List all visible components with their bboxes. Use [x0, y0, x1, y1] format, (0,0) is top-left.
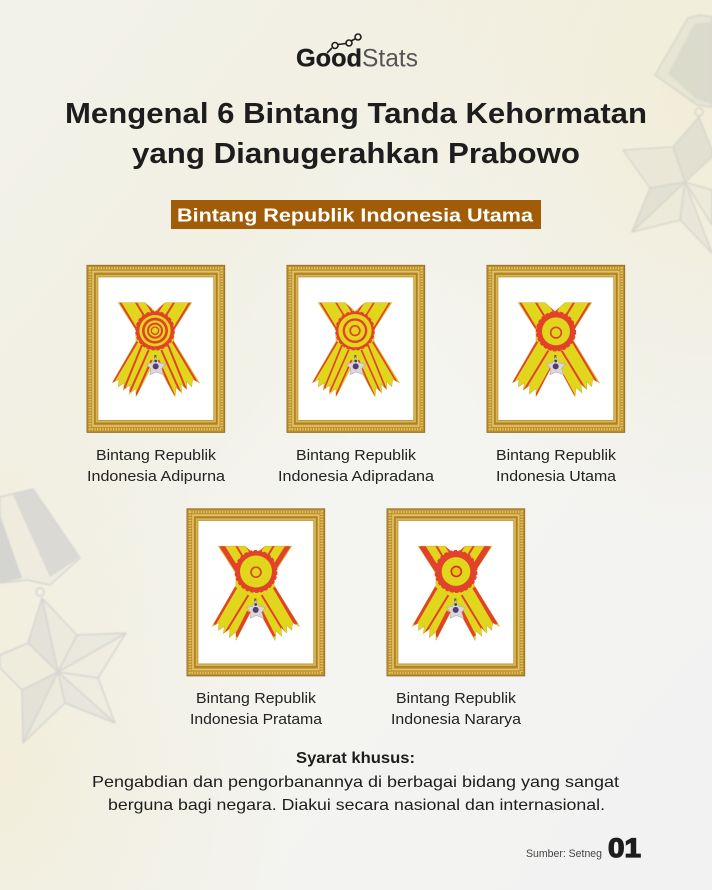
caption: Nararya: Indonesia Nararya [391, 712, 522, 728]
medal card: Adipradana [278, 265, 435, 485]
logo: GoodStats: Good [296, 44, 362, 72]
logo chart line [327, 34, 361, 53]
banner: Bintang Republik Indonesia Utama [171, 200, 541, 229]
framed image: Utama [487, 265, 625, 433]
text block: special requirements [92, 750, 620, 814]
caption: Adipradana: Bintang Republik [296, 448, 417, 464]
caption: Utama: Bintang Republik [496, 448, 617, 464]
text block: special requirements: berguna bagi negara. Diakui secara nasional dan internasional. [108, 797, 605, 814]
caption: Pratama [190, 691, 323, 728]
framed image: Adipradana [287, 265, 425, 433]
caption: Utama [496, 448, 617, 485]
caption: Adipurna: Indonesia Adipurna [87, 469, 226, 485]
framed image: Adipurna [87, 265, 225, 433]
caption: Adipradana [278, 448, 435, 485]
logo: GoodStats [296, 34, 418, 72]
page number: 01 [608, 833, 641, 863]
caption: Nararya [391, 691, 522, 728]
caption: Pratama: Bintang Republik [196, 691, 317, 707]
framed image: Nararya [387, 508, 525, 676]
text block: special requirements: Syarat khusus: [296, 750, 415, 767]
medal card: Pratama [187, 508, 325, 728]
decorative medal sketch: top right [623, 15, 712, 253]
decorative medal sketch: bottom left [0, 489, 126, 743]
title: Mengenal 6 Bintang Tanda Kehormatan [65, 98, 647, 130]
caption: Nararya: Bintang Republik [396, 691, 517, 707]
text block: special requirements: Pengabdian dan pengorbanannya di berbagai bidang yang sangat [92, 774, 620, 791]
caption: Pratama: Indonesia Pratama [190, 712, 323, 728]
title: yang Dianugerahkan Prabowo [132, 138, 580, 170]
caption: Adipurna [87, 448, 226, 485]
caption: Adipradana: Indonesia Adipradana [278, 469, 435, 485]
banner: Bintang Republik Indonesia Utama: Bintang Republik Indonesia Utama [177, 204, 534, 226]
source note: Sumber: Setneg [526, 848, 602, 860]
caption: Utama: Indonesia Utama [496, 469, 617, 485]
framed image: Pratama [187, 508, 325, 676]
logo: GoodStats: Stats [362, 44, 418, 72]
caption: Adipurna: Bintang Republik [96, 448, 217, 464]
title [65, 98, 647, 170]
medal card: Adipurna [87, 265, 226, 485]
medal card: Nararya [387, 508, 525, 728]
medal card: Utama [487, 265, 625, 485]
